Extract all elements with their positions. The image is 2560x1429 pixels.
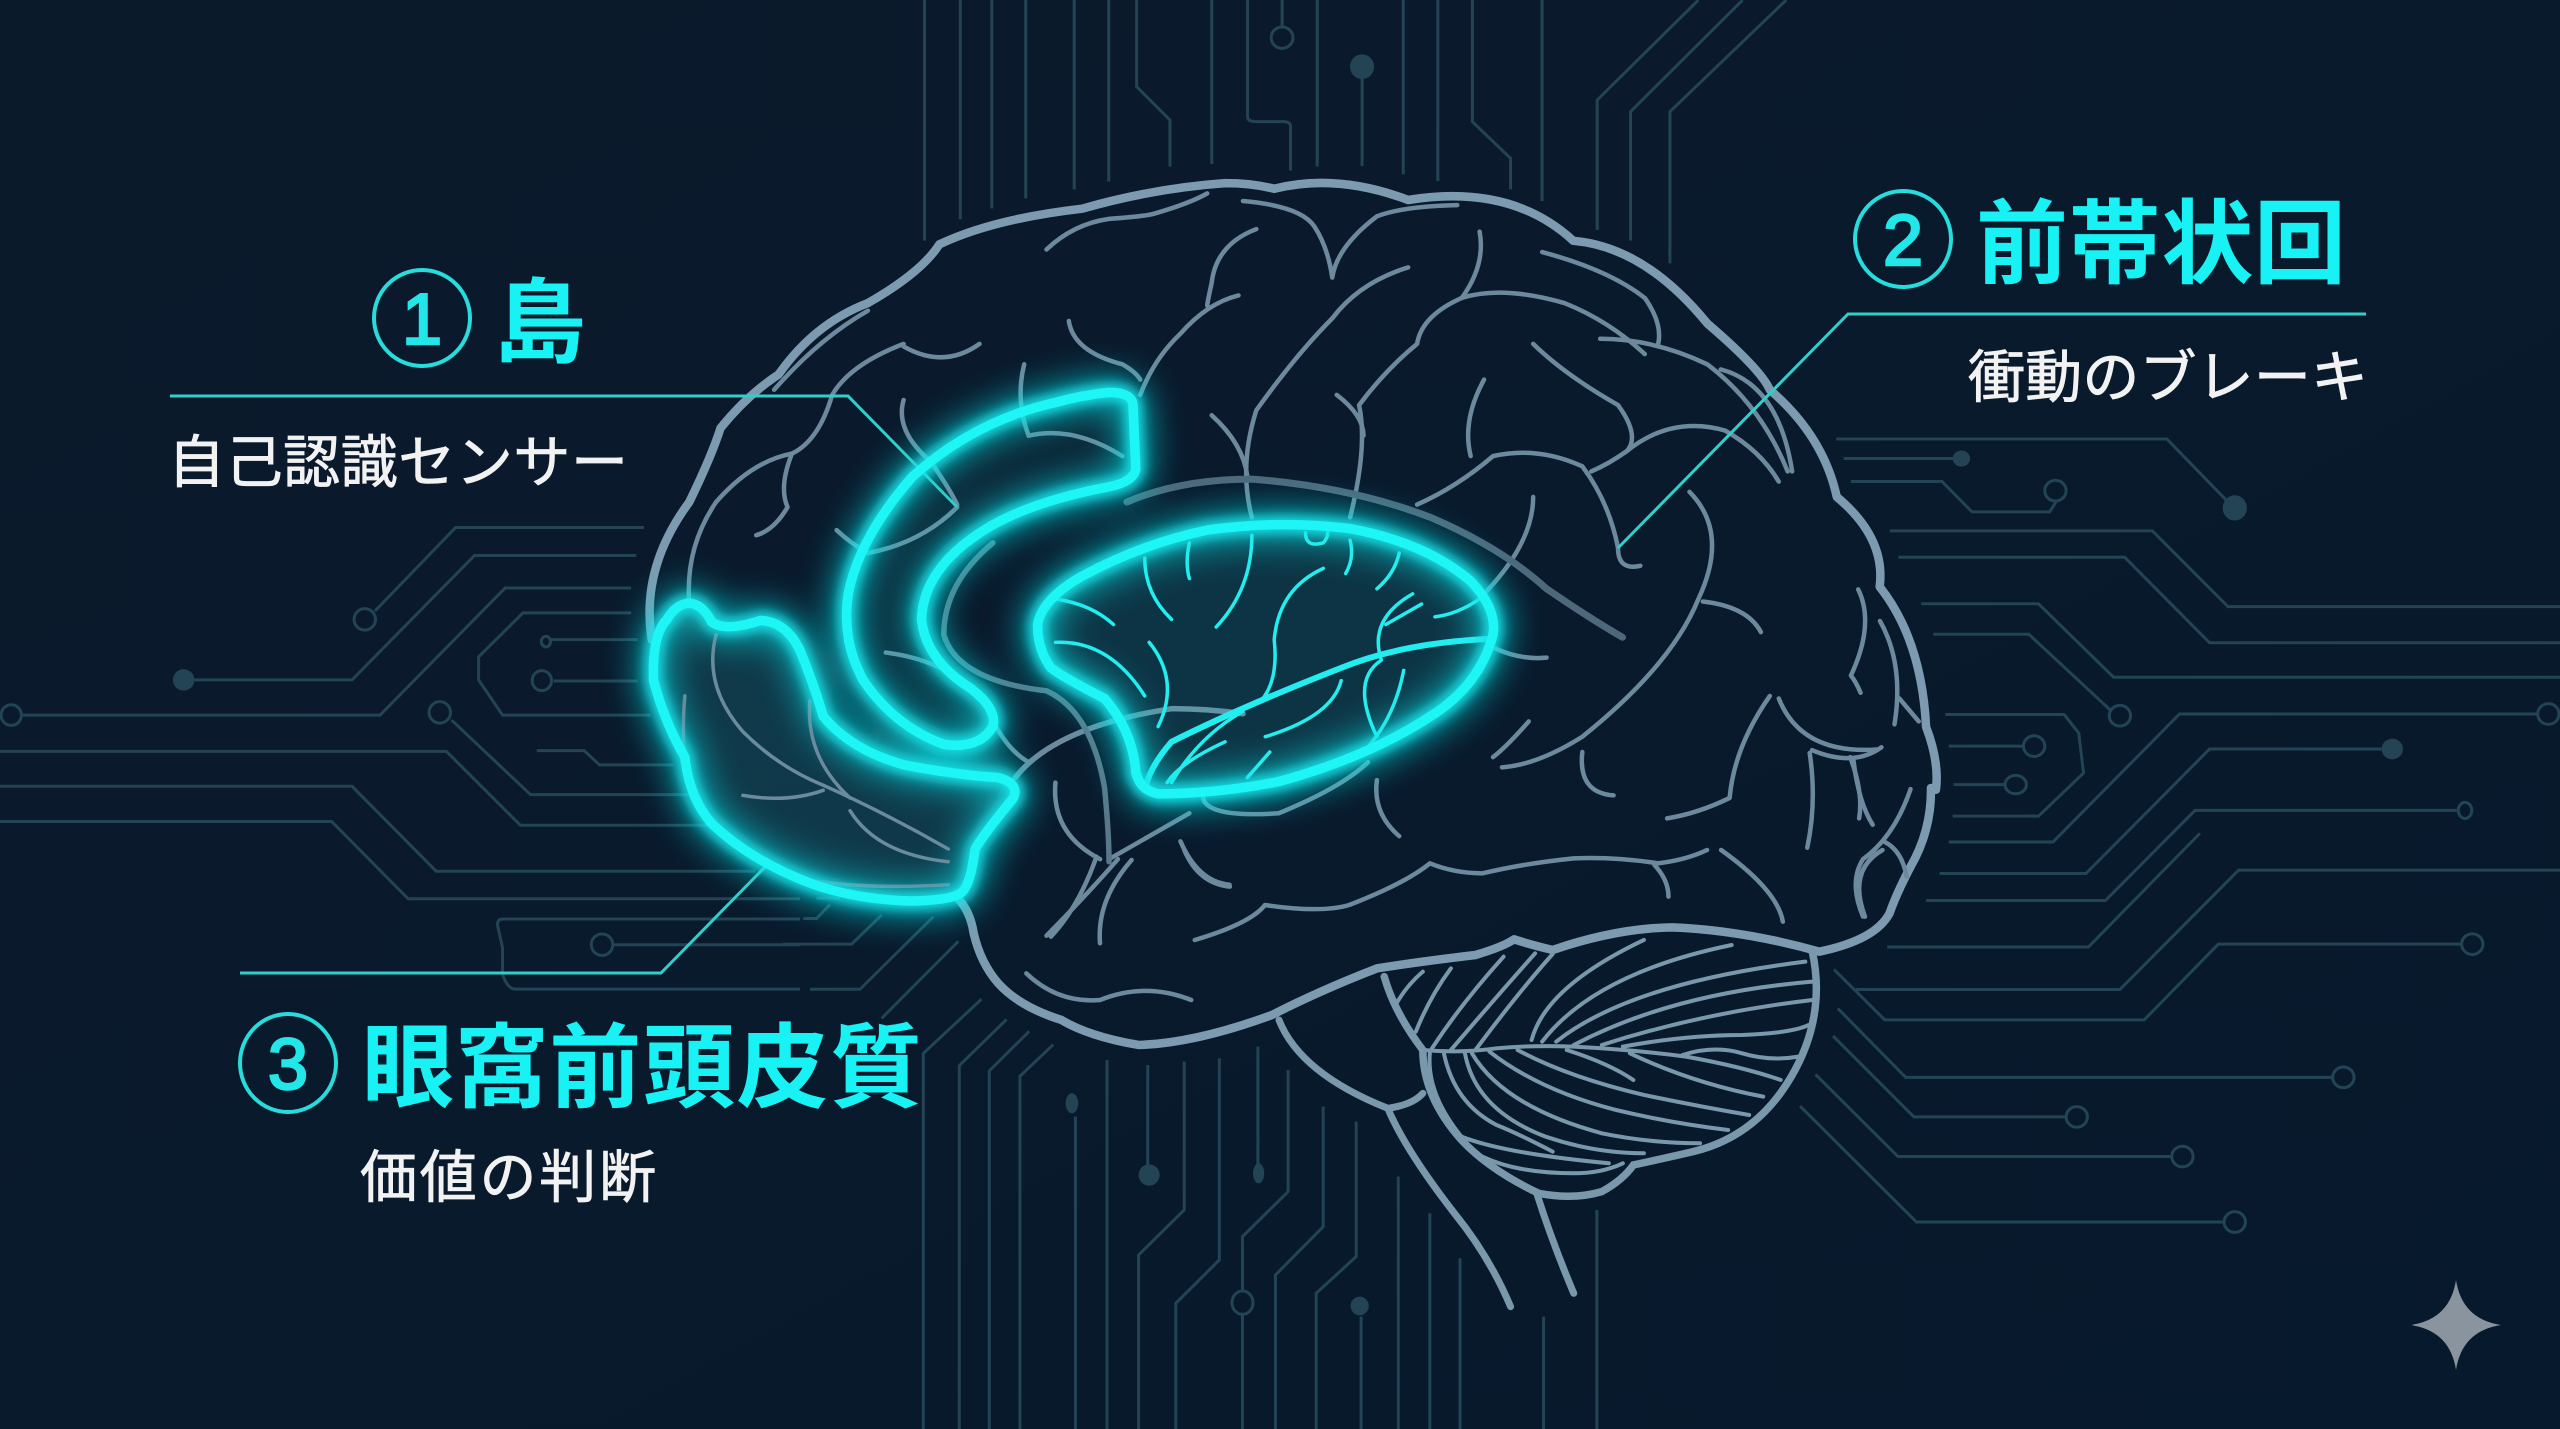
label 3: orbitofrontal [240, 1014, 922, 1210]
lower temporal folds [1026, 850, 1883, 1000]
number badge 3 [240, 1014, 336, 1112]
glow region: anterior cingulate oval [1038, 525, 1494, 794]
description 3: 価値の判断 [360, 1146, 656, 1210]
number badge 2 [1855, 191, 1951, 287]
brainstem [1279, 1020, 1574, 1307]
leader line: insula [170, 396, 957, 507]
circuit traces: top [925, 0, 1786, 263]
orbitofrontal inner folds [683, 635, 948, 886]
brain: outer contour [650, 183, 1937, 1045]
number badge 2: 2 [1883, 201, 1923, 281]
circuit traces: lower left [783, 898, 1053, 1429]
cerebrum upper outline [650, 183, 1937, 790]
label 2: anterior cingulate [1855, 191, 2368, 410]
cerebellum outline [1384, 952, 1816, 1196]
heading 1: 島 [494, 273, 586, 375]
number badge 3: 3 [268, 1025, 308, 1105]
description 1: 自己認識センサー [168, 431, 628, 495]
icon: sparkle [2411, 1280, 2501, 1370]
label 1: insula [168, 270, 628, 495]
glow halo [653, 392, 1494, 901]
number badge 1 [374, 270, 470, 366]
glow region: insula [847, 392, 1136, 745]
cerebellum and brainstem [1279, 940, 1816, 1307]
heading 2: 前帯状回 [1976, 194, 2346, 296]
leader line: anterior cingulate [1618, 314, 2366, 548]
circuit traces: left [0, 528, 800, 989]
circuit traces: right [1800, 439, 2560, 1232]
cerebrum lower outline [956, 788, 1931, 1045]
brain: sulci [689, 193, 1919, 1000]
oval inner folds [1055, 533, 1493, 790]
number badge 1: 1 [402, 280, 442, 360]
leader line: orbitofrontal [240, 867, 765, 973]
circuit traces: bottom center [1066, 1047, 1597, 1429]
heading 3: 眼窩前頭皮質 [362, 1018, 922, 1120]
cerebellum folia [1395, 940, 1812, 1173]
right edge folds [1807, 589, 1919, 917]
description 2: 衝動のブレーキ [1968, 346, 2368, 410]
upper hemisphere folds [689, 193, 1877, 936]
glow region: orbitofrontal cortex [653, 603, 1015, 901]
